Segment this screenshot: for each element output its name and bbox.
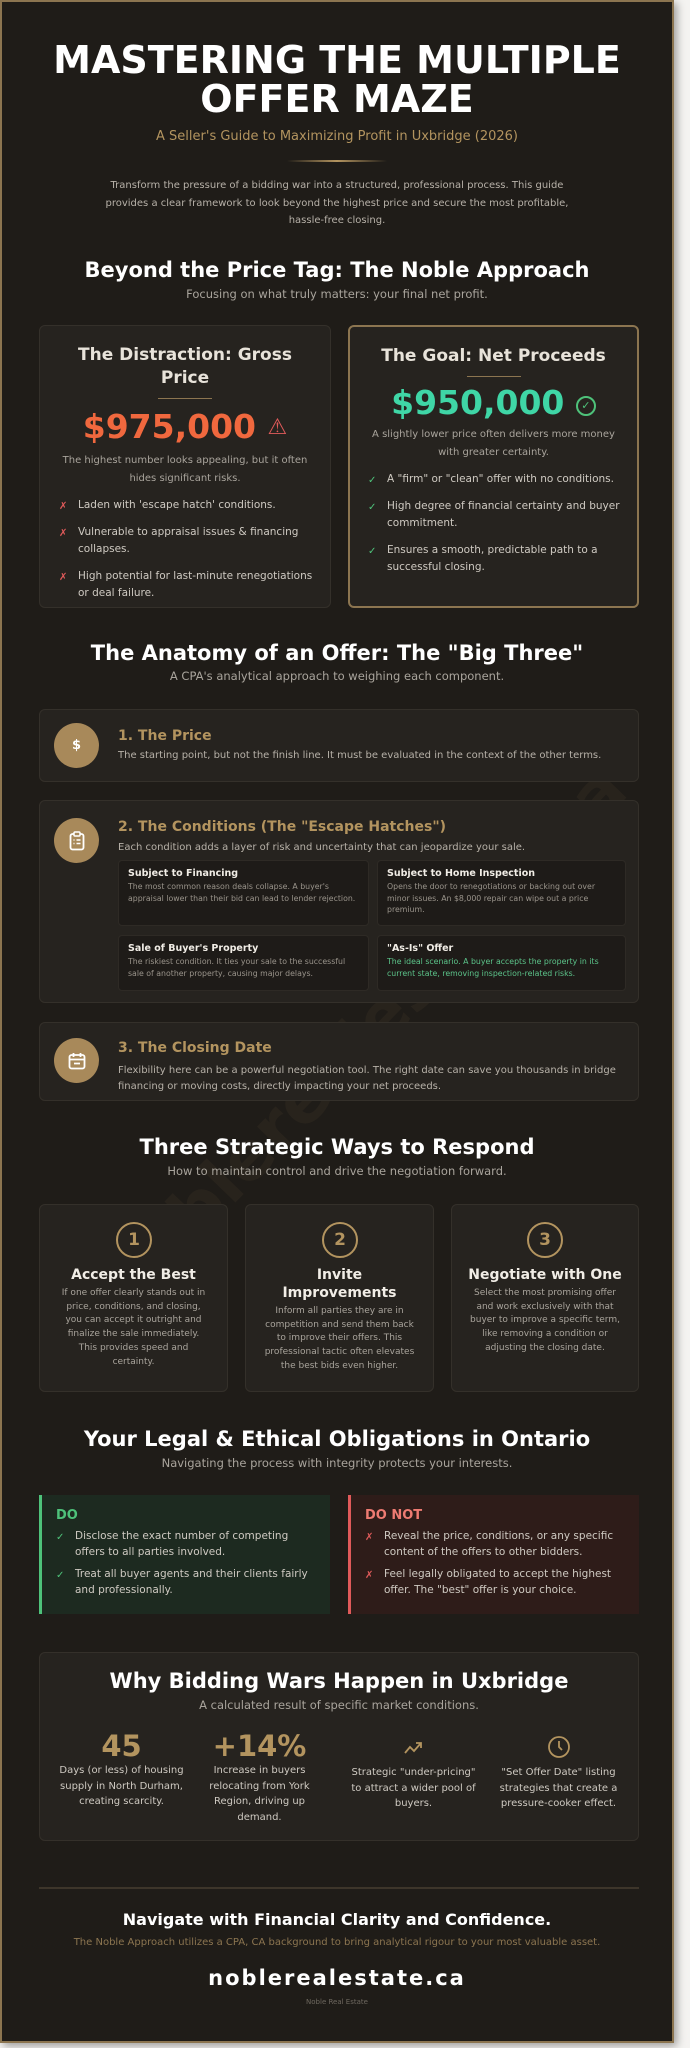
condition: sale of buyer's property: The riskiest condition. It ties your sale to the successful sale of another property, causing major delays.	[128, 957, 345, 978]
footer heading: Navigate with Financial Clarity and Confidence.	[123, 1910, 551, 1929]
stat: 45	[59, 1729, 184, 1807]
stat: set offer date	[500, 1736, 617, 1809]
card: invite	[245, 1204, 434, 1392]
subheading: A calculated result of specific market conditions.	[199, 1698, 479, 1712]
heading: three ways: Three Strategic Ways to Respond	[140, 1135, 534, 1159]
subheading: How to maintain control and drive the negotiation forward.	[167, 1164, 507, 1178]
benefit list: ✓	[368, 502, 376, 512]
stat: 14%: Increase in buyers relocating from York Region, driving up demand.	[209, 1765, 310, 1823]
card title: Improvements	[282, 1285, 397, 1301]
title	[53, 38, 621, 121]
divider	[287, 160, 387, 162]
risk list: Laden with 'escape hatch' conditions.	[78, 499, 276, 511]
icon: clipboard	[54, 818, 99, 863]
condition: as-is	[377, 935, 626, 991]
icon: dollar	[54, 723, 99, 768]
risk list	[59, 499, 312, 599]
benefit list: ✓	[368, 475, 376, 486]
do not list: Feel legally obligated to accept the highest offer. The "best" offer is your choice.	[384, 1568, 611, 1596]
card text: Select the most promising offer and work exclusively with that buyer to improve a specific term, like removing a condition or adjusting the closing date.	[470, 1288, 620, 1353]
footer small print: Noble Real Estate	[306, 1998, 368, 2006]
benefit list: ✓	[368, 546, 376, 556]
stat: under-pricing	[351, 1742, 476, 1809]
panel: conditions	[39, 800, 639, 1003]
price: $950,000	[391, 383, 564, 422]
panel: price	[39, 709, 639, 782]
stat: 45: 45	[101, 1729, 142, 1763]
do not list: ✗	[365, 1532, 373, 1543]
icon: calendar	[54, 1038, 99, 1083]
icon: dollar: $	[72, 738, 81, 753]
condition: financing: The most common reason deals collapse. A buyer's appraisal lower than their bid can lead to lender rejection.	[128, 882, 355, 902]
description: The highest number looks appealing, but it often hides significant risks.	[63, 455, 307, 484]
do not heading: DO NOT	[365, 1508, 422, 1523]
card title: Negotiate with One	[468, 1267, 622, 1283]
do not list	[365, 1530, 613, 1596]
risk list: ✗	[59, 528, 67, 538]
intro text: Transform the pressure of a bidding war into a structured, professional process. This guide provides a clear framework to look beyond the highest price and secure the most profitable, hassle-free closing.	[106, 180, 568, 226]
number 1	[116, 1222, 152, 1258]
description: A slightly lower price often delivers more money with greater certainty.	[372, 429, 615, 458]
stat: under-pricing: Strategic "under-pricing" to attract a wider pool of buyers.	[351, 1767, 476, 1809]
heading: Why Bidding Wars Happen in Uxbridge	[110, 1669, 568, 1693]
price text: The starting point, but not the finish line. It must be evaluated in the context of the other terms.	[118, 750, 601, 761]
stat: set offer date: "Set Offer Date" listing strategies that create a pressure-cooker effect.	[500, 1767, 617, 1809]
subtitle: A Seller's Guide to Maximizing Profit in Uxbridge (2026)	[156, 129, 518, 144]
panel: do not	[348, 1495, 639, 1614]
do not list: Reveal the price, conditions, or any specific content of the offers to other bidders.	[384, 1530, 613, 1558]
price: $975,000 ⚠	[83, 407, 287, 446]
conditions text: Each condition adds a layer of risk and uncertainty that can jeopardize your sale.	[118, 842, 525, 853]
title: OFFER MAZE	[200, 77, 474, 121]
risk list: ✗	[59, 572, 67, 582]
card text: Inform all parties they are in competition and send them back to improve their offers. This professional tactic often elevates the best bids even higher.	[265, 1306, 414, 1371]
conditions heading: 2. The Conditions (The "Escape Hatches")	[118, 819, 446, 835]
watermark: noblerealestate.ca	[87, 751, 642, 1322]
benefit list: Ensures a smooth, predictable path to a successful closing.	[387, 544, 598, 573]
heading: legal: Your Legal & Ethical Obligations in Ontario	[84, 1427, 590, 1451]
number 2: 2	[334, 1230, 346, 1250]
panel heading: The Goal: Net Proceeds	[381, 346, 606, 366]
closing heading: 3. The Closing Date	[118, 1040, 272, 1056]
condition: financing	[118, 860, 369, 926]
panel: do	[39, 1495, 330, 1614]
number 3: 3	[539, 1230, 551, 1250]
heading: noble approach: Beyond the Price Tag: The Noble Approach	[85, 258, 589, 282]
condition: financing: Subject to Financing	[128, 868, 238, 879]
stat: 14%: +14%	[213, 1729, 306, 1763]
benefit list	[368, 473, 620, 573]
do list: ✓	[56, 1570, 64, 1581]
condition: inspection: Subject to Home Inspection	[387, 868, 535, 879]
price: ✓	[581, 399, 590, 412]
card text: If one offer clearly stands out in price, conditions, and closing, you can accept it outright and finalize the sale immediately. This provides speed and certainty.	[62, 1288, 205, 1367]
risk list: High potential for last-minute renegotiations or deal failure.	[78, 570, 312, 599]
condition: inspection	[377, 860, 626, 926]
card title: Accept the Best	[71, 1267, 196, 1283]
condition: sale of buyer's property: Sale of Buyer's Property	[128, 943, 258, 954]
condition: sale of buyer's property	[118, 935, 369, 991]
panel: why bidding wars	[39, 1652, 639, 1841]
footer domain: noblerealestate.ca	[208, 1966, 466, 1990]
risk list: Vulnerable to appraisal issues & financing collapses.	[78, 526, 298, 555]
condition: as-is: The ideal scenario. A buyer accepts the property in its current state, removing inspection-related risks.	[387, 957, 599, 978]
price heading: 1. The Price	[118, 728, 212, 744]
benefit list: A "firm" or "clean" offer with no conditions.	[387, 473, 614, 485]
panel: goal	[348, 325, 639, 608]
card title: Invite	[317, 1267, 362, 1283]
subheading: Navigating the process with integrity protects your interests.	[162, 1456, 512, 1470]
number 2	[322, 1222, 358, 1258]
panel heading: The Distraction: Gross Price	[78, 345, 292, 388]
title: MASTERING THE MULTIPLE	[53, 38, 621, 82]
risk list: ✗	[59, 501, 67, 512]
do list: Treat all buyer agents and their clients fairly and professionally.	[75, 1568, 308, 1596]
card title	[282, 1267, 397, 1301]
card: accept	[39, 1204, 228, 1392]
stat: 14%	[209, 1729, 310, 1823]
number 3	[527, 1222, 563, 1258]
do not list: ✗	[365, 1570, 373, 1581]
card: negotiate	[451, 1204, 639, 1392]
condition: inspection: Opens the door to renegotiations or backing out over minor issues. An $8,000 repair can wipe out a price premium.	[387, 882, 595, 914]
do list	[56, 1530, 308, 1596]
panel: distraction	[39, 325, 331, 608]
do heading: DO	[56, 1508, 78, 1523]
benefit list: High degree of financial certainty and buyer commitment.	[387, 500, 620, 529]
number 1: 1	[128, 1230, 140, 1250]
subheading: Focusing on what truly matters: your final net profit.	[186, 287, 488, 301]
do list: Disclose the exact number of competing offers to all parties involved.	[75, 1530, 288, 1558]
footer tagline: The Noble Approach utilizes a CPA, CA background to bring analytical rigour to your most valuable asset.	[74, 1937, 600, 1948]
subheading: A CPA's analytical approach to weighing each component.	[170, 669, 504, 683]
do list: ✓	[56, 1532, 64, 1543]
condition: as-is: "As-Is" Offer	[387, 943, 453, 954]
closing text: Flexibility here can be a powerful negotiation tool. The right date can save you thousands in bridge financing or moving costs, directly impacting your net proceeds.	[118, 1065, 616, 1092]
heading: anatomy: The Anatomy of an Offer: The "Big Three"	[91, 641, 583, 665]
stat: 45: Days (or less) of housing supply in North Durham, creating scarcity.	[59, 1765, 184, 1807]
panel: closing date	[39, 1022, 639, 1101]
